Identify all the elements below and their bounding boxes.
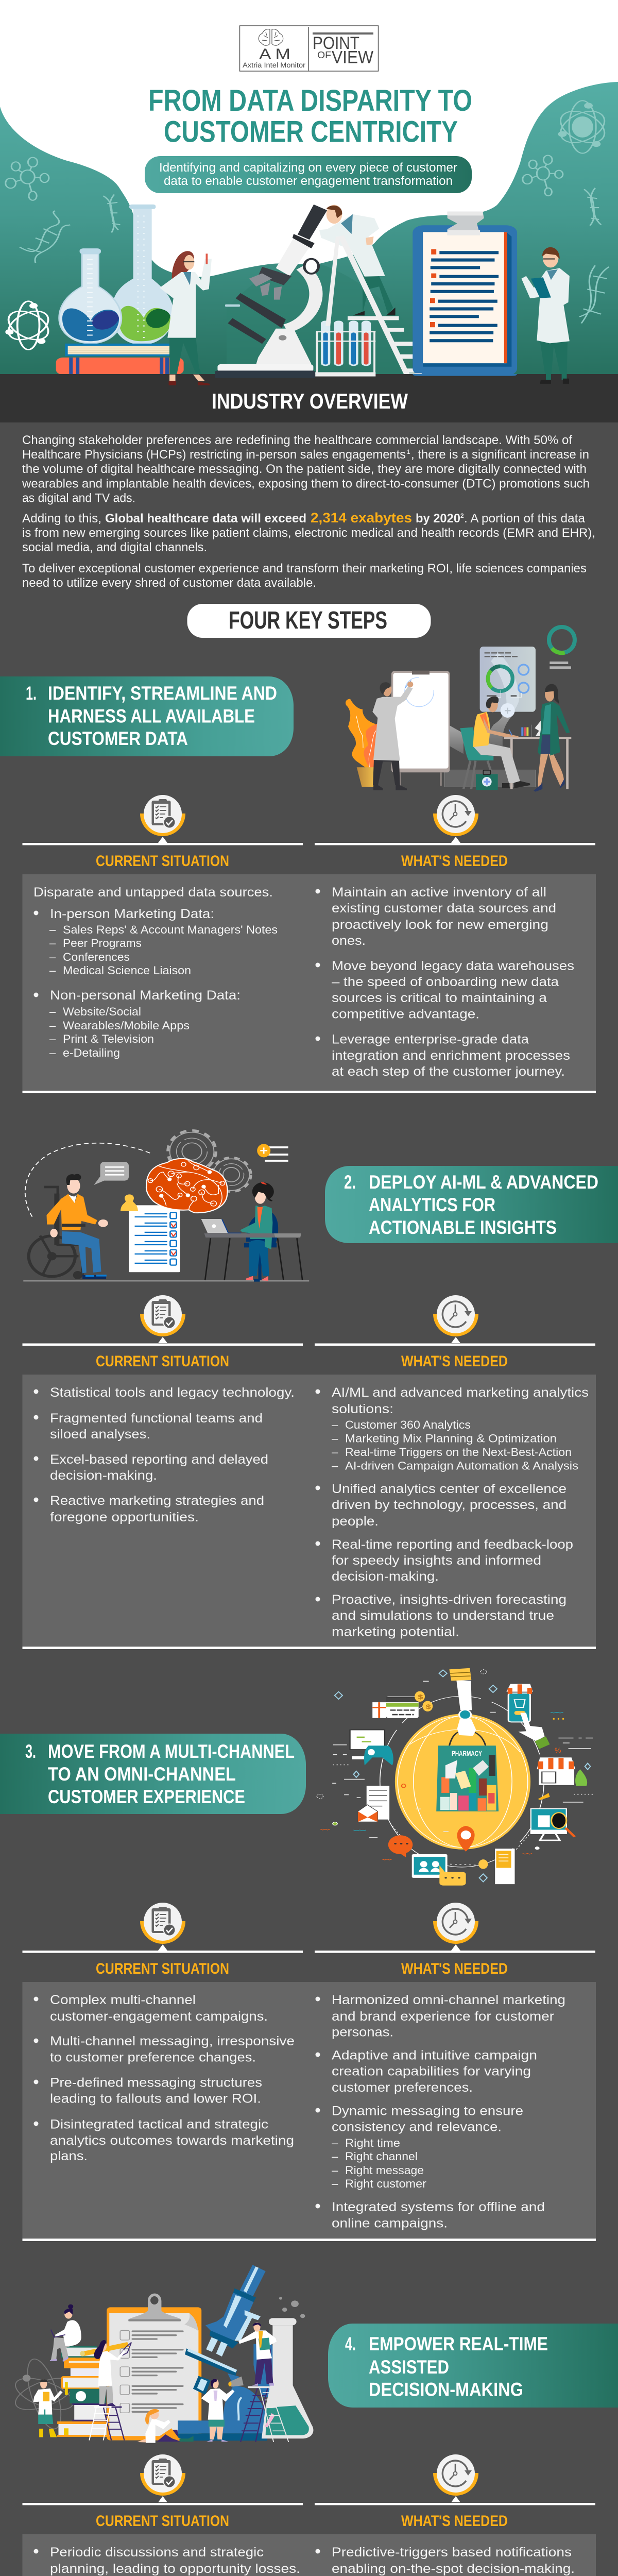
flasks and books illustration	[56, 205, 184, 375]
step 4 banner: EMPOWER REAL-TIME	[369, 2333, 548, 2354]
current situation list: –	[49, 1019, 56, 1032]
current situation list: e-Detailing	[63, 1046, 120, 1059]
intro text block: is from new emerging sources like patient claims, electronic medical and health records (EMR and EHR),	[22, 526, 595, 540]
step 4 comparison section	[23, 2454, 596, 2576]
person with megaphone	[201, 2377, 244, 2442]
person with yellow clipboard	[33, 2379, 63, 2437]
intro text block: by 2020	[416, 512, 460, 526]
current situation list: Medical Science Liaison	[63, 964, 191, 977]
location pin	[457, 1826, 475, 1852]
step 4 illustration: decision-making team	[10, 2265, 313, 2443]
current situation list: foregone opportunities.	[50, 1510, 199, 1524]
scientist on ladder	[319, 205, 422, 375]
what's needed list: sources is critical to maintaining a	[332, 991, 547, 1005]
panel background	[23, 874, 596, 1091]
what's needed list: –	[332, 2177, 338, 2190]
what's needed list: Real-time reporting and feedback-loop	[332, 1537, 573, 1552]
person with pencil	[80, 2340, 131, 2406]
current situation list: planning, leading to opportunity losses.	[50, 2562, 300, 2576]
plus list icon	[257, 1144, 288, 1161]
what's needed list: –	[332, 1432, 338, 1445]
whiteboard	[391, 671, 450, 772]
what's needed list: people.	[332, 1514, 379, 1529]
panel background	[23, 1375, 596, 1647]
current situation list: Fragmented functional teams and	[50, 1411, 263, 1426]
what's needed list	[315, 1385, 589, 1639]
current situation list: –	[49, 951, 56, 963]
what's needed list: online campaigns.	[332, 2216, 448, 2231]
current situation list	[34, 1385, 295, 1524]
step 3 illustration: omni-channel pharmacy: %	[555, 1746, 561, 1754]
science line art	[6, 100, 613, 324]
table and lab kit	[504, 737, 571, 739]
current situation list: Peer Programs	[63, 937, 142, 950]
intro text block: Healthcare Physicians (HCPs) restricting in-person sales engagements	[22, 448, 406, 462]
current situation list: leading to fallouts and lower ROI.	[50, 2092, 261, 2106]
intro text block: 1	[407, 448, 410, 455]
monitor with magnifier	[531, 1793, 575, 1840]
checklist	[121, 1194, 180, 1272]
intro text block: , there is a significant increase in	[411, 448, 589, 462]
white atom	[1, 301, 56, 350]
current situation list: –	[49, 923, 56, 936]
icon: what's needed	[433, 1903, 478, 1951]
orbit	[380, 1696, 544, 1867]
step 3 banner: TO AN OMNI-CHANNEL	[48, 1764, 236, 1785]
what's needed list: Right time	[345, 2137, 400, 2149]
what's needed list	[315, 885, 574, 1079]
icon: current situation	[140, 2454, 185, 2502]
standing woman	[534, 684, 570, 792]
four key steps pill	[187, 604, 431, 638]
brain mark	[259, 29, 283, 45]
axtria intel monitor logo: OF	[317, 50, 331, 60]
kiosk and coin	[478, 1849, 514, 1884]
intro text block: the volume of digital healthcare messaging. On the patient side, they are more digitally connected with	[22, 462, 587, 476]
subtitle pill	[145, 156, 472, 193]
intro text block: Global healthcare data will exceed	[105, 512, 306, 526]
intro text block: Adding to this,	[22, 512, 101, 526]
step 1 comparison section	[23, 795, 596, 1093]
step 4 banner: ASSISTED	[369, 2357, 449, 2378]
gift and web page with coins	[372, 1691, 433, 1718]
woman at desk	[201, 1182, 302, 1281]
current situation list: Website/Social	[63, 1005, 141, 1018]
step 1 banner: HARNESS ALL AVAILABLE	[48, 706, 255, 726]
main title	[148, 84, 472, 148]
what's needed list: ones.	[332, 934, 366, 948]
current situation list: –	[49, 1032, 56, 1045]
icon: current situation	[140, 795, 185, 843]
step 3 illustration: omni-channel pharmacy: PHARMACY	[452, 1750, 482, 1757]
current situation list: Pre-defined messaging structures	[50, 2075, 262, 2090]
what's needed list: Integrated systems for offline and	[332, 2200, 545, 2214]
what's needed list: Unified analytics center of excellence	[332, 1482, 566, 1496]
current situation list: decision-making.	[50, 1468, 157, 1483]
what's needed list: and brand experience for customer	[332, 2009, 554, 2024]
panel background	[23, 2534, 596, 2576]
microscope blue	[178, 2265, 279, 2441]
step 2 illustration: AI and analytics	[23, 1130, 309, 1281]
first aid kit	[476, 770, 498, 790]
left molecule	[6, 158, 49, 200]
intro text block: Changing stakeholder preferences are redefining the healthcare commercial landscape. With 50% of	[22, 433, 572, 447]
what's needed list: Leverage enterprise-grade data	[332, 1032, 529, 1047]
ladders	[89, 2386, 288, 2442]
header panel	[0, 0, 618, 385]
current situation list: –	[49, 937, 56, 950]
what's needed list: competitive advantage.	[332, 1007, 479, 1021]
current situation list: Sales Reps' & Account Managers' Notes	[63, 923, 278, 936]
step 1 banner: IDENTIFY, STREAMLINE AND	[48, 683, 277, 704]
teal blob background	[0, 82, 618, 376]
person on books	[49, 2304, 81, 2362]
what's needed list: –	[332, 2137, 338, 2149]
intro text block: wearables and implantable health devices, exposing them to direct-to-consumer (DTC) promotions such	[22, 477, 590, 490]
industry overview band: INDUSTRY OVERVIEW	[212, 389, 408, 413]
heading: current situation: CURRENT SITUATION	[96, 1353, 229, 1370]
clipboard	[413, 212, 517, 376]
what's needed list: Predictive-triggers based notifications	[332, 2545, 572, 2560]
axtria intel monitor logo: Axtria Intel Monitor	[243, 61, 306, 69]
step 3 illustration: omni-channel pharmacy	[317, 1668, 595, 1886]
what's needed list: consistency and relevance.	[332, 2120, 502, 2134]
what's needed list: driven by technology, processes, and	[332, 1498, 566, 1512]
what's needed list: marketing potential.	[332, 1625, 459, 1639]
chat bubble orange	[388, 1835, 413, 1857]
heading: current situation: CURRENT SITUATION	[96, 2513, 229, 2530]
what's needed list: Harmonized omni-channel marketing	[332, 1993, 565, 2007]
current situation list: –	[49, 1005, 56, 1018]
document and envelope	[358, 1786, 389, 1822]
current situation list: In-person Marketing Data:	[50, 907, 214, 921]
current situation list	[34, 1993, 295, 2163]
plant	[346, 699, 375, 768]
current situation list: analytics outcomes towards marketing	[50, 2133, 294, 2148]
step 3 banner: 3.	[25, 1741, 36, 1762]
yellow globe	[395, 1714, 530, 1850]
icon: what's needed	[433, 2454, 478, 2502]
what's needed list: Maintain an active inventory of all	[332, 885, 546, 900]
current situation list: Statistical tools and legacy technology.	[50, 1385, 295, 1400]
what's needed list: creation capabilities for varying	[332, 2064, 531, 2079]
heading: what's needed: WHAT'S NEEDED	[401, 1960, 508, 1977]
intro text block: social media, and digital channels.	[22, 540, 207, 554]
current situation list	[34, 2545, 300, 2576]
current situation list: to customer preference changes.	[50, 2050, 256, 2065]
phone and pointing hand	[506, 1684, 550, 1749]
what's needed list: AI-driven Campaign Automation & Analysis	[345, 1459, 578, 1472]
what's needed list: Adaptive and intuitive campaign	[332, 2048, 537, 2063]
gears	[168, 1130, 251, 1192]
intro text block: 2	[460, 512, 464, 519]
step 2 banner: 2.	[344, 1172, 356, 1193]
current situation list: plans.	[50, 2149, 88, 2163]
seated man	[460, 697, 530, 789]
axtria intel monitor logo: VIEW	[332, 47, 373, 67]
what's needed list: Real-time Triggers on the Next-Best-Action	[345, 1446, 572, 1459]
what's needed list: –	[332, 2150, 338, 2163]
main title: CUSTOMER CENTRICITY	[164, 115, 458, 148]
icon: current situation	[140, 1295, 185, 1343]
what's needed list: Move beyond legacy data warehouses	[332, 959, 574, 973]
what's needed list: –	[332, 1459, 338, 1472]
step 4 banner: DECISION-MAKING	[369, 2379, 523, 2400]
dashed arc	[25, 1143, 152, 1217]
green hump behind the microscope	[227, 264, 412, 376]
step 1 banner: 1.	[26, 683, 37, 704]
step 2 banner	[325, 1166, 618, 1243]
gift and web page with coins: $	[418, 1694, 423, 1701]
heading: what's needed: WHAT'S NEEDED	[401, 853, 508, 870]
orange clipboard	[107, 2294, 201, 2441]
step 3 banner	[0, 1734, 306, 1814]
what's needed list: at each step of the customer journey.	[332, 1064, 565, 1079]
current situation list: Non-personal Marketing Data:	[50, 988, 241, 1003]
intro text block: To deliver exceptional customer experience and transform their marketing ROI, life sciences companies	[22, 562, 587, 575]
video call screen	[412, 1854, 466, 1886]
intro text block: 2,314 exabytes	[311, 510, 412, 526]
what's needed list: Right message	[345, 2164, 424, 2177]
current situation list: –	[49, 964, 56, 977]
left flask	[59, 253, 122, 344]
current situation list: Disintegrated tactical and strategic	[50, 2117, 268, 2132]
what's needed list: Dynamic messaging to ensure	[332, 2104, 523, 2119]
floor box and beam	[444, 770, 536, 787]
heading: current situation: CURRENT SITUATION	[96, 853, 229, 870]
what's needed list: Marketing Mix Planning & Optimization	[345, 1432, 557, 1445]
bag handles and hand	[449, 1730, 486, 1745]
book stack	[57, 2346, 107, 2437]
current situation list: Multi-channel messaging, irresponsive	[50, 2034, 295, 2048]
current situation list: Conferences	[63, 951, 130, 963]
what's needed list: and simulations to understand true	[332, 1608, 554, 1623]
current situation list: Disparate and untapped data sources.	[33, 885, 273, 900]
current situation list: Complex multi-channel	[50, 1993, 196, 2007]
what's needed list: personas.	[332, 2025, 393, 2039]
gift and web page with coins: $	[426, 1704, 431, 1710]
axtria intel monitor logo: A M	[259, 46, 290, 63]
step 4 banner: 4.	[345, 2333, 356, 2354]
step 2 banner: ANALYTICS FOR	[369, 1194, 495, 1215]
what's needed list: AI/ML and advanced marketing analytics	[332, 1385, 589, 1400]
what's needed list: solutions:	[332, 1402, 393, 1416]
what's needed list: integration and enrichment processes	[332, 1048, 570, 1063]
scientist with notes	[521, 247, 570, 384]
speech bubble	[94, 1162, 129, 1185]
intro text block: . A portion of this data	[464, 512, 586, 526]
books	[65, 344, 169, 356]
step 1 illustration: data team	[346, 627, 575, 792]
what's needed list	[315, 1993, 565, 2231]
icon: what's needed	[433, 795, 478, 843]
what's needed list: Right customer	[345, 2177, 426, 2190]
ladder	[325, 235, 422, 375]
what's needed list: – the speed of onboarding new data	[332, 975, 559, 989]
circuit brain	[146, 1158, 228, 1213]
right molecule	[523, 156, 563, 196]
current situation list: –	[49, 1046, 56, 1059]
step 3 banner: CUSTOMER EXPERIENCE	[48, 1786, 245, 1807]
storefront	[537, 1757, 587, 1786]
intro text block: as digital and TV ads.	[22, 492, 135, 505]
what's needed list: Proactive, insights-driven forecasting	[332, 1592, 566, 1607]
right atom	[552, 100, 613, 153]
step 3 comparison section	[23, 1903, 596, 2241]
woman scientist	[160, 251, 212, 385]
atom	[10, 2356, 78, 2432]
what's needed list: for speedy insights and informed	[332, 1553, 541, 1568]
data screen	[480, 647, 536, 718]
intro text block	[22, 433, 595, 590]
heading: what's needed: WHAT'S NEEDED	[401, 2513, 508, 2530]
flask	[262, 2297, 313, 2438]
what's needed list: customer preferences.	[332, 2080, 473, 2095]
man at whiteboard	[372, 682, 413, 790]
what's needed list: –	[332, 2164, 338, 2177]
current situation list: Print & Television	[63, 1032, 154, 1045]
four key steps pill: FOUR KEY STEPS	[229, 607, 387, 634]
step 3 banner: MOVE FROM A MULTI-CHANNEL	[48, 1741, 295, 1762]
test tubes	[315, 320, 375, 377]
heading: what's needed: WHAT'S NEEDED	[401, 1353, 508, 1370]
what's needed list: –	[332, 1418, 338, 1431]
industry overview band	[0, 373, 618, 422]
what's needed list: Customer 360 Analytics	[345, 1418, 471, 1431]
person on ladder at microscope	[238, 2323, 277, 2386]
what's needed list: enabling on-the-spot decision-making.	[332, 2562, 575, 2576]
right flask	[112, 209, 174, 345]
subtitle pill: data to enable customer engagement transformation	[164, 174, 453, 188]
icon: current situation	[140, 1903, 185, 1951]
what's needed list: –	[332, 1446, 338, 1459]
monitor and gamepad	[350, 1730, 393, 1766]
current situation list: Excel-based reporting and delayed	[50, 1452, 268, 1467]
intro text block: need to utilize every shred of customer data available.	[22, 576, 316, 590]
axtria intel monitor logo: POINT	[313, 33, 359, 53]
panel background	[23, 1982, 596, 2239]
step 2 banner: ACTIONABLE INSIGHTS	[369, 1217, 557, 1238]
pharmacy bag	[436, 1745, 499, 1811]
man in wheelchair	[29, 1174, 108, 1279]
current situation list: Reactive marketing strategies and	[50, 1494, 264, 1508]
current situation list: Wearables/Mobile Apps	[63, 1019, 190, 1032]
current situation list	[33, 885, 278, 1059]
what's needed list: proactively look for new emerging	[332, 918, 548, 932]
step 4 banner	[328, 2324, 618, 2408]
step 1 banner: CUSTOMER DATA	[48, 728, 188, 749]
what's needed list	[315, 2545, 585, 2576]
sparkles and dashes	[335, 1670, 590, 1882]
subtitle pill: Identifying and capitalizing on every piece of customer	[159, 161, 457, 175]
floating donut	[549, 627, 575, 653]
microscope	[215, 205, 327, 378]
main title: FROM DATA DISPARITY TO	[148, 84, 472, 117]
icon: what's needed	[433, 1295, 478, 1343]
step 1 banner	[0, 676, 294, 756]
what's needed list: Right channel	[345, 2150, 418, 2163]
current situation list: Periodic discussions and strategic	[50, 2545, 264, 2560]
feet overlapping band	[169, 373, 569, 385]
dna strands	[20, 188, 609, 324]
heading: current situation: CURRENT SITUATION	[96, 1960, 229, 1977]
current situation list: customer-engagement campaigns.	[50, 2009, 268, 2024]
what's needed list: decision-making.	[332, 1569, 439, 1584]
what's needed list: existing customer data sources and	[332, 901, 556, 916]
step 2 comparison section	[23, 1295, 596, 1649]
current situation list: siloed analyses.	[50, 1427, 150, 1442]
person sitting with phone	[138, 2409, 194, 2443]
axtria intel monitor logo	[240, 26, 378, 71]
